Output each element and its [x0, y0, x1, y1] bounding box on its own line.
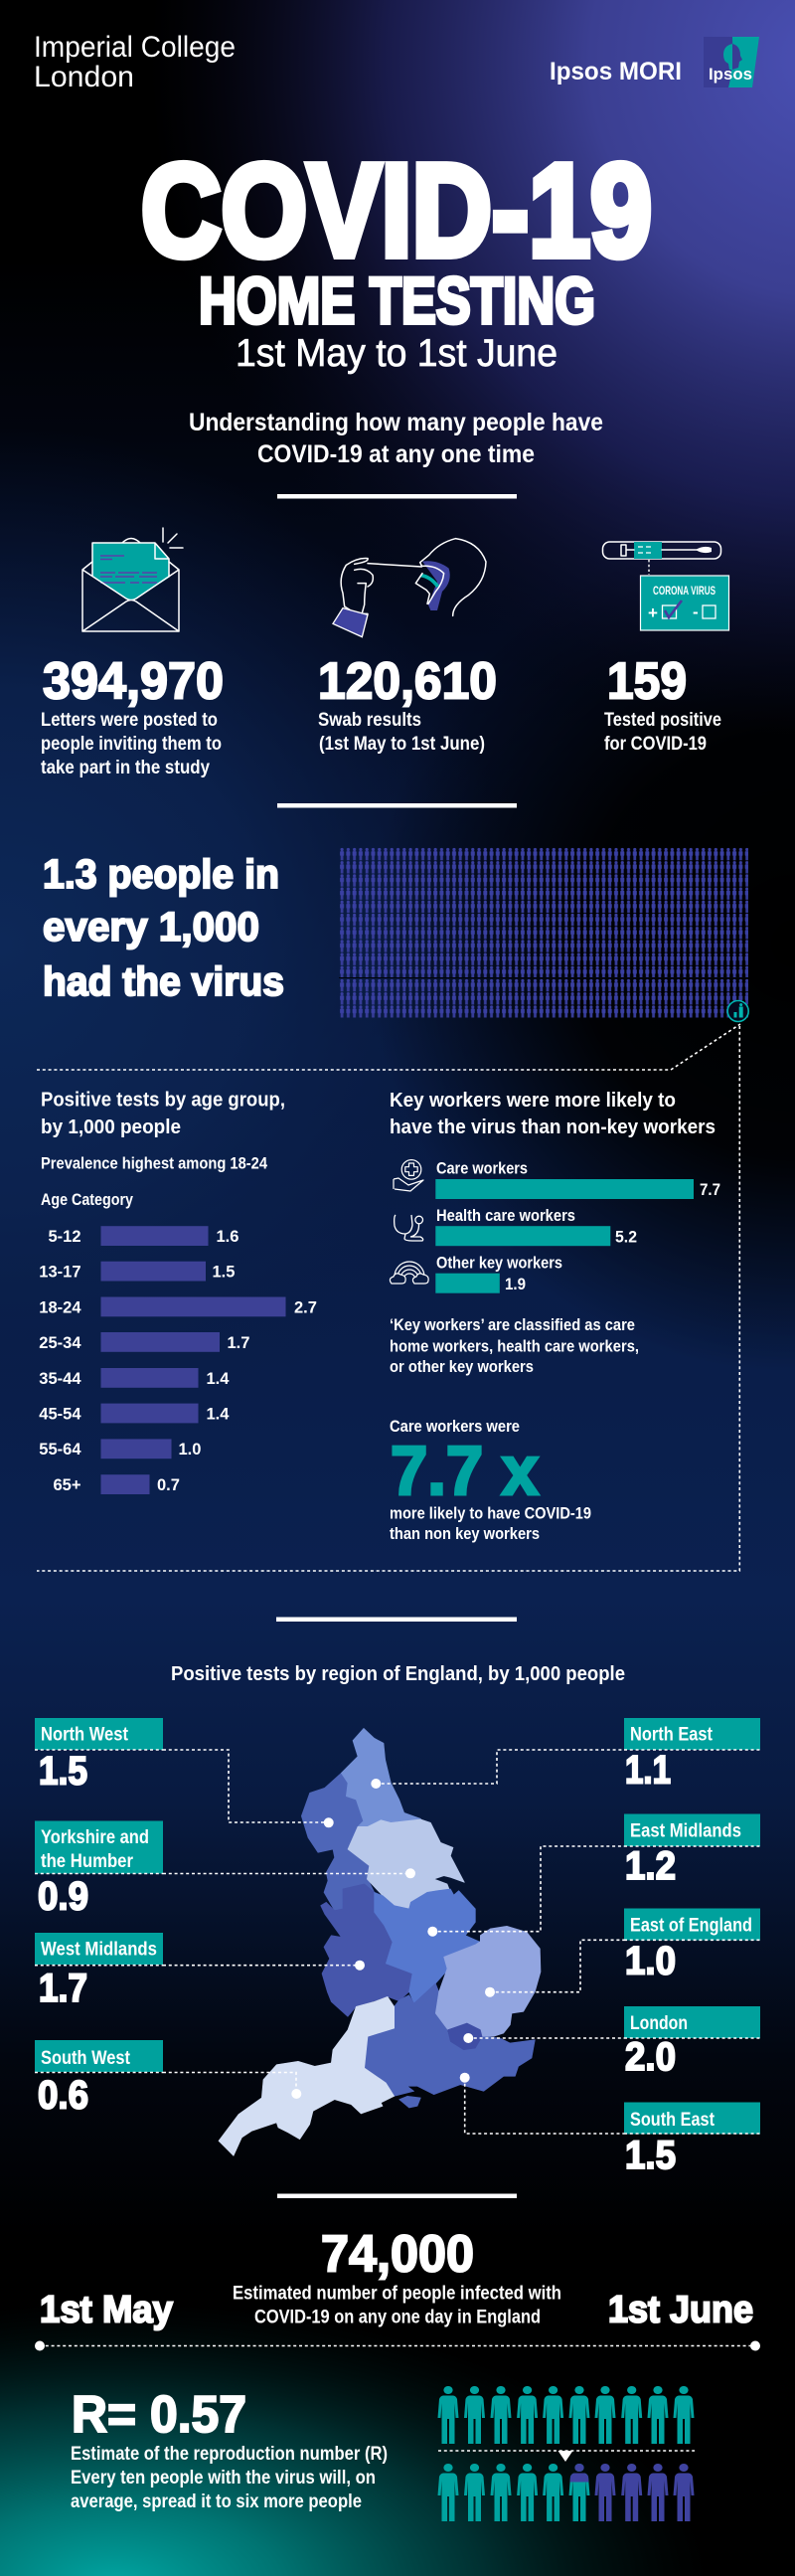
- stat: swab results: (1st May to 1st June): [319, 733, 485, 755]
- region: East of England: [435, 1926, 541, 2036]
- label: East of England: [624, 1909, 760, 1982]
- logo: Ipsos MORI: [550, 37, 759, 87]
- region: East Midlands: [375, 1889, 480, 2003]
- logo: Imperial College London: London: [34, 61, 134, 93]
- timeline: [35, 2289, 760, 2350]
- label: West Midlands: [35, 1933, 163, 2010]
- stat: tested positive: Tested positive: [604, 709, 721, 731]
- region: Yorkshire and the Humber: [348, 1819, 464, 1909]
- subtitle: COVID-19 at any one time: [257, 440, 535, 468]
- heading: have the virus than non-key workers: [390, 1116, 716, 1138]
- region: South East: [365, 1983, 535, 2108]
- callout: 7.7 x: 7.7 x: [391, 1432, 539, 1509]
- stat: tested positive: for COVID-19: [604, 733, 707, 755]
- timeline: 1st June: [608, 2289, 753, 2330]
- stat: tested positive: [604, 652, 721, 755]
- bar chart: age: 1.7: [227, 1334, 249, 1352]
- stat: tested positive: 159: [607, 652, 687, 710]
- label: South East: 1.5: [625, 2134, 676, 2177]
- callout: 7.7 x: than non key workers: [390, 1525, 540, 1543]
- heading: 1.3 people in every 1,000: every 1,000: [43, 904, 259, 949]
- logo: Ipsos MORI: Ipsos MORI: [550, 58, 682, 86]
- label: London: [624, 2006, 760, 2079]
- label: Yorkshire and the Humber: the Humber: [41, 1850, 133, 1872]
- label: Yorkshire and the Humber: [35, 1821, 163, 1919]
- chart: grid of 1,000 people: [339, 847, 748, 1022]
- bar chart: key workers: [435, 1159, 720, 1293]
- title: COVID-19: [141, 137, 652, 283]
- label: East of England: East of England: [630, 1915, 752, 1937]
- bar chart: key workers: Health care workers: [436, 1207, 575, 1225]
- label: East Midlands: [624, 1813, 760, 1888]
- bar chart: age: 1.4: [207, 1406, 230, 1424]
- stat: reproduction number: Estimate of the reproduction number (R): [71, 2443, 388, 2465]
- label: North East: North East: [630, 1724, 713, 1746]
- map of England: [219, 1728, 541, 2155]
- text: key worker definition: [390, 1316, 639, 1376]
- icon: caring hand with cross: [394, 1160, 423, 1191]
- label: South East: South East: [630, 2109, 715, 2131]
- text: key worker definition: ‘Key workers’ are classified as care: [390, 1316, 635, 1334]
- bar chart: age: [39, 1226, 317, 1494]
- label: South East: [624, 2102, 760, 2177]
- logo: Ipsos MORI: Ipsos: [709, 65, 752, 84]
- region: North West: [301, 1773, 375, 1911]
- text: key worker definition: or other key workers: [390, 1358, 534, 1376]
- icon: envelope with letter: [82, 528, 183, 631]
- bar chart: key workers: 7.7: [700, 1181, 720, 1199]
- bar chart: age: 25-34: [39, 1334, 81, 1352]
- icon: test swab and result card: -: [693, 602, 699, 621]
- label: Yorkshire and the Humber: 0.9: [38, 1875, 88, 1919]
- label: London: London: [630, 2012, 688, 2034]
- label: West Midlands: 1.7: [39, 1967, 87, 2010]
- stat: 74,000 estimated infected: [233, 2225, 561, 2328]
- heading: 1.3 people in every 1,000: had the virus: [43, 958, 284, 1004]
- region: West Midlands: [321, 1884, 412, 2016]
- title: 1st May to 1st June: [236, 332, 557, 375]
- stat: letters posted: [41, 652, 224, 778]
- stat: swab results: 120,610: [318, 652, 497, 710]
- bar chart: age: 65+: [54, 1476, 81, 1494]
- timeline: 1st May: [40, 2289, 173, 2330]
- connector lines: [163, 1750, 624, 2134]
- panel: key workers: [390, 1089, 720, 1543]
- label: London: 2.0: [625, 2035, 676, 2079]
- bar chart: key workers: Care workers: [436, 1159, 528, 1177]
- label: East Midlands: East Midlands: [630, 1819, 741, 1841]
- label: North East: 1.1: [625, 1748, 671, 1792]
- bar chart: age: 55-64: [39, 1441, 81, 1459]
- icon: test swab and result card: +: [648, 603, 658, 622]
- stat: letters posted: 394,970: [43, 652, 224, 710]
- stat: 74,000 estimated infected: Estimated number of people infected with: [233, 2283, 561, 2305]
- heading: Age Category: [41, 1191, 134, 1209]
- heading: Prevalence highest among 18-24: [41, 1155, 268, 1173]
- callout: 7.7 x: Care workers were: [390, 1418, 520, 1436]
- bar chart: key workers: 5.2: [615, 1229, 637, 1247]
- callout: 7.7 x: [390, 1418, 591, 1543]
- heading: by 1,000 people: [41, 1116, 181, 1138]
- stat: letters posted: Letters were posted to: [41, 709, 218, 731]
- logo: Imperial College London: Imperial College: [34, 31, 236, 64]
- heading: Positive tests by age group,: [41, 1088, 285, 1112]
- region: London: [448, 2023, 482, 2050]
- label: North West: North West: [41, 1724, 128, 1746]
- label: West Midlands: West Midlands: [41, 1939, 157, 1961]
- bar chart: age: 2.7: [294, 1298, 317, 1316]
- stat: swab results: Swab results: [318, 709, 421, 731]
- bar chart: age: 1.5: [213, 1263, 235, 1281]
- icon: stethoscope: [395, 1215, 423, 1241]
- bar chart: age: 1.0: [179, 1441, 201, 1459]
- label: East of England: 1.0: [625, 1939, 676, 1982]
- subtitle: [189, 409, 603, 468]
- bar chart: key workers: 1.9: [505, 1276, 526, 1293]
- panel: positive tests by age group: [39, 1088, 317, 1494]
- subtitle: Understanding how many people have: [189, 409, 603, 436]
- heading: [41, 1088, 285, 1209]
- panel: headline statistics: [41, 528, 729, 778]
- heading: Key workers were more likely to: [390, 1089, 676, 1112]
- callout: 7.7 x: more likely to have COVID-19: [390, 1505, 591, 1523]
- label: North West: 1.5: [39, 1750, 87, 1794]
- bar chart: age: 5-12: [48, 1228, 81, 1246]
- stat: 74,000 estimated infected: 74,000: [321, 2225, 474, 2283]
- icon: rainbow and clouds: [390, 1262, 428, 1284]
- title: [141, 137, 652, 375]
- label: South West: 0.6: [38, 2074, 88, 2118]
- icon: test swab and result card: CORONA VIRUS: [653, 586, 716, 598]
- label: North East: [624, 1718, 760, 1792]
- heading: regions: Positive tests by region of England, by 1,000 people: [171, 1662, 625, 1685]
- chart: ten people spread to six: [437, 2386, 695, 2521]
- icon: nasal swab: [333, 539, 486, 637]
- logo: Imperial College London: [34, 31, 236, 93]
- label: Yorkshire and the Humber: Yorkshire and: [41, 1826, 149, 1848]
- bar chart: age: 18-24: [39, 1298, 81, 1316]
- title: HOME TESTING: [199, 263, 595, 337]
- heading: 1.3 people in every 1,000: 1.3 people in: [43, 851, 279, 897]
- bar chart: age: 45-54: [39, 1406, 81, 1424]
- dotted frame: [37, 1024, 740, 1571]
- stat: swab results: [318, 652, 497, 755]
- label: South West: South West: [41, 2047, 130, 2069]
- text: key worker definition: home workers, health care workers,: [390, 1338, 639, 1356]
- stat: letters posted: take part in the study: [41, 757, 210, 778]
- region: North East: [341, 1728, 422, 1827]
- heading: [390, 1089, 716, 1138]
- bar chart: age: 0.7: [157, 1476, 180, 1494]
- stat: letters posted: people inviting them to: [41, 733, 222, 755]
- bar chart: age: 1.6: [217, 1228, 238, 1246]
- label: South West: [35, 2040, 163, 2118]
- stat: reproduction number: R= 0.57: [72, 2386, 246, 2444]
- heading: 1.3 people in every 1,000: [43, 851, 284, 1004]
- bar chart: age: 13-17: [39, 1263, 81, 1281]
- icon: test swab and result card: [602, 542, 729, 630]
- stat: reproduction number: [71, 2386, 388, 2512]
- stat: reproduction number: average, spread it to six more people: [71, 2490, 362, 2512]
- stat: reproduction number: Every ten people with the virus will, on: [71, 2467, 376, 2489]
- region: South West: [219, 1996, 395, 2155]
- bar chart: age: 1.4: [207, 1370, 230, 1388]
- bar chart: key workers: Other key workers: [436, 1255, 562, 1273]
- label: North West: [35, 1718, 163, 1794]
- stat: 74,000 estimated infected: COVID-19 on any one day in England: [254, 2307, 541, 2328]
- label: East Midlands: 1.2: [625, 1844, 676, 1888]
- bar chart: age: 35-44: [39, 1370, 81, 1388]
